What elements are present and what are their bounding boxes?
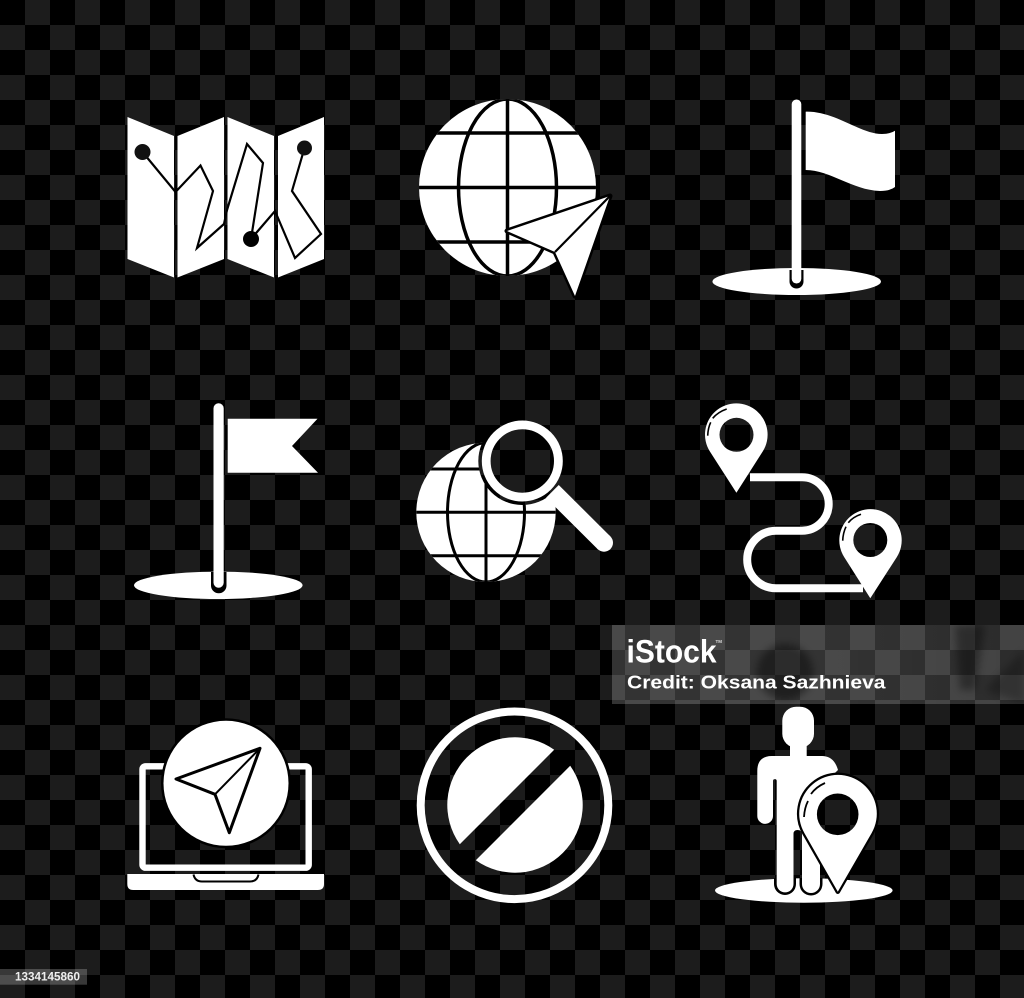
image id badge: 1334145860 [15,970,80,984]
icon: laptop with paper plane [127,718,324,890]
icon: folded map with route [128,117,324,278]
icon: pennant flag on pole [134,403,318,599]
icon: waving flag on pole [712,100,895,295]
icon: globe with paper plane [415,95,610,296]
trademark mark: TM [716,639,722,644]
icon: person with map pin [715,707,893,903]
icon: no entry sign [421,712,608,899]
icon: route between two map pins [705,403,902,598]
icon: globe with magnifying glass [414,425,613,585]
image id badge [0,969,87,985]
iStock wordmark: iStock [626,634,717,670]
watermark banner [612,625,1024,704]
credit line: Credit: Oksana Sazhnieva [627,672,886,693]
